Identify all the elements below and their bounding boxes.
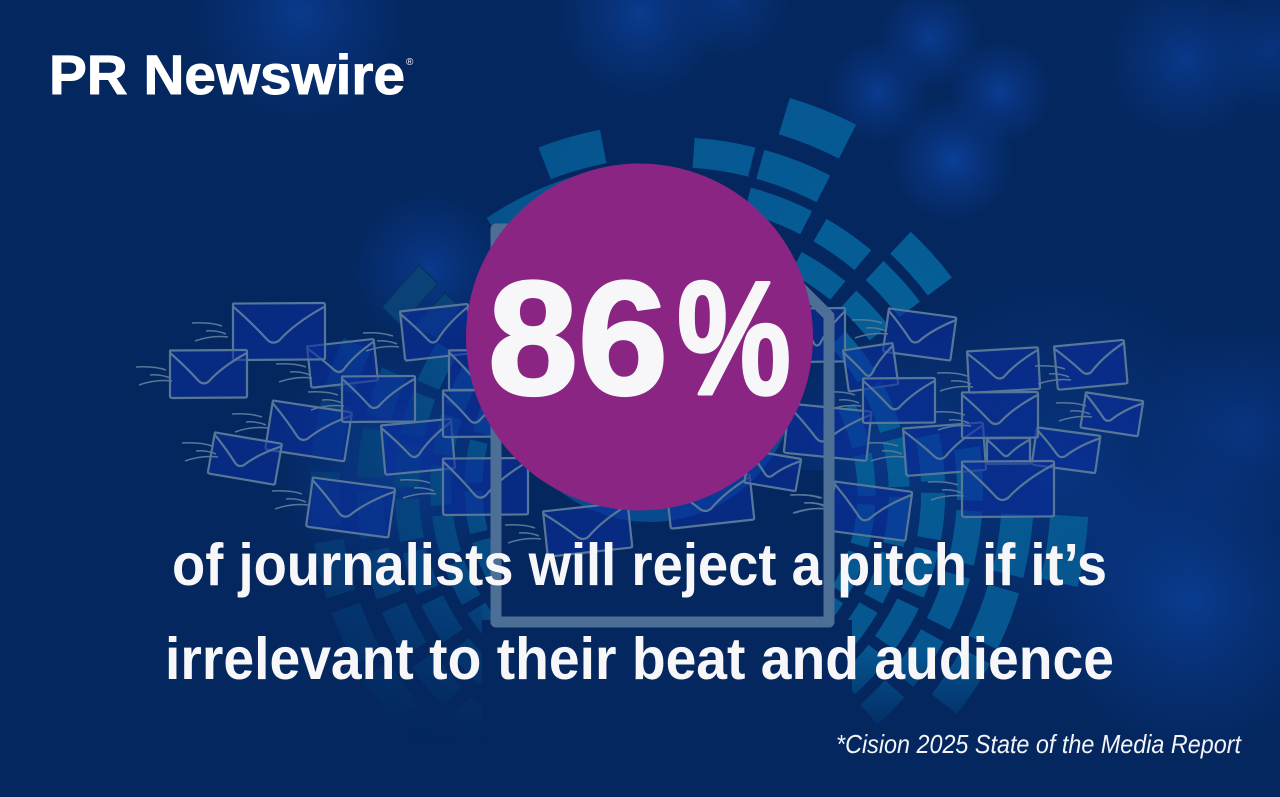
source footnote: *Cision 2025 State of the Media Report — [836, 729, 1243, 759]
logo: PR Newswire: ® — [406, 57, 414, 68]
logo: PR Newswire: PR Newswire — [49, 43, 405, 106]
central disc behind stat circle — [503, 228, 797, 522]
radial tile rings — [325, 116, 1069, 762]
envelope group centre — [505, 450, 826, 557]
statistic number: 86 — [488, 248, 668, 429]
statement text — [165, 532, 1114, 692]
document interior — [496, 470, 829, 622]
statement text: of journalists will reject a pitch if it’s — [172, 532, 1107, 598]
email envelopes — [136, 303, 1143, 557]
document outline — [496, 229, 829, 622]
envelope group right — [784, 308, 1143, 541]
statistic number: % — [677, 248, 791, 429]
statement text: irrelevant to their beat and audience — [165, 626, 1114, 692]
statistic circle — [466, 164, 813, 510]
envelope group left — [136, 303, 528, 538]
tilted tiles left of circle — [382, 265, 461, 338]
